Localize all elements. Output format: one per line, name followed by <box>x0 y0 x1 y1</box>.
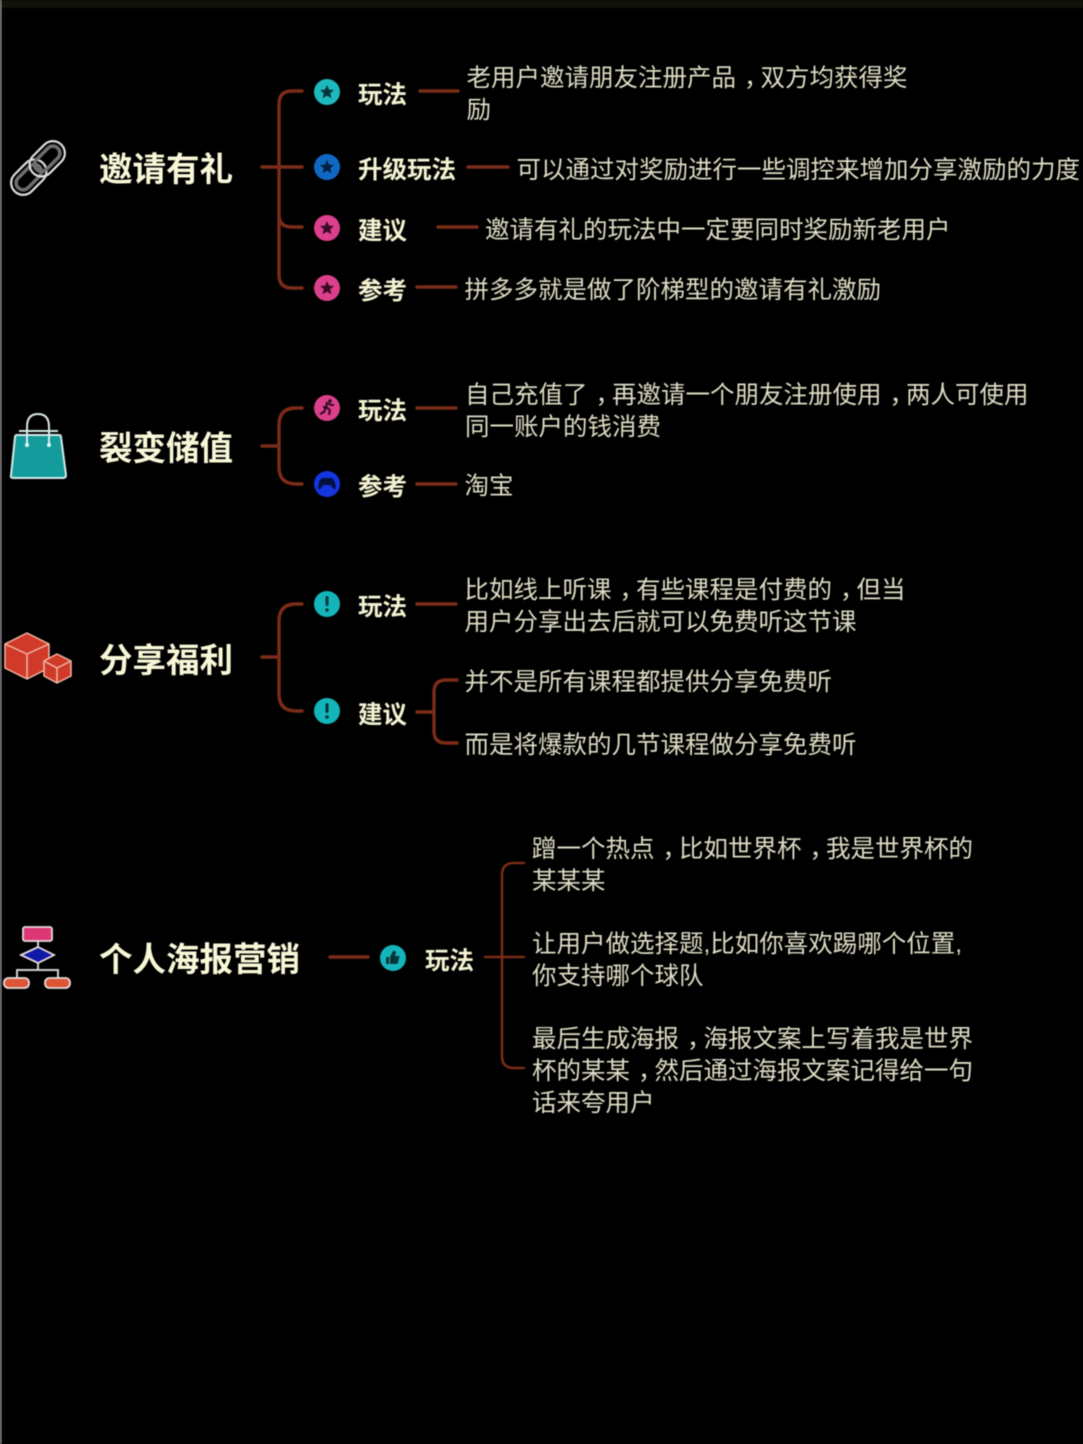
heading: 分享福利: 分享福利 <box>99 643 233 680</box>
item: 参考: 拼多多就是做了阶梯型的邀请有礼激励 <box>464 276 881 304</box>
section: 邀请有礼 <box>6 64 1080 305</box>
bracket connector <box>262 408 302 484</box>
item: 玩法: 老用户邀请朋友注册产品 ，双方均获得奖 <box>466 64 908 92</box>
icon: shopping bag <box>11 414 66 478</box>
item: 玩法: 玩法 <box>358 397 407 425</box>
connector to 玩法 <box>330 955 368 959</box>
item: 玩法: 同一账户的钱消费 <box>465 413 661 441</box>
item: 升级玩法: 升级玩法 <box>358 156 456 184</box>
heading: 个人海报营销: 个人海报营销 <box>99 942 300 979</box>
text: 选择题: 你支持哪个球队 <box>532 962 704 990</box>
item: 升级玩法 <box>314 154 1080 184</box>
section: 分享福利 <box>5 576 906 759</box>
section: 个人海报营销 <box>4 835 973 1117</box>
text: 生成海报: 杯的某某 ，然后通过海报文案记得给一句 <box>532 1057 973 1085</box>
text: 生成海报: 最后生成海报 ，海报文案上写着我是世界 <box>532 1025 973 1053</box>
item: 玩法 <box>314 576 906 636</box>
item: 玩法: 玩法 <box>358 81 407 109</box>
item: 建议: 并不是所有课程都提供分享免费听 <box>464 668 832 696</box>
bracket connector <box>262 91 302 288</box>
item: 建议: 而是将爆款的几节课程做分享免费听 <box>464 731 856 759</box>
heading: 邀请有礼: 邀请有礼 <box>99 152 233 189</box>
item: 玩法: 励 <box>466 96 491 124</box>
text: 蹭热点: 某某某 <box>532 867 606 895</box>
text: 蹭热点 <box>532 835 973 895</box>
item: 参考 <box>314 275 881 305</box>
icon: chain link <box>6 136 70 200</box>
item: 建议: 建议 <box>358 217 407 245</box>
bracket connector <box>485 863 524 1068</box>
item: 玩法: 比如线上听课 ，有些课程是付费的 ，但当 <box>464 576 906 604</box>
section: 裂变储值 <box>11 381 1028 501</box>
item: 玩法 <box>314 64 908 124</box>
text: 选择题 <box>532 930 962 990</box>
item: 玩法: 用户分享出去后就可以免费听这节课 <box>464 608 856 636</box>
item: 参考: 参考 <box>358 276 407 305</box>
item: 玩法 <box>314 381 1028 441</box>
icon: red boxes <box>5 633 71 683</box>
bracket connector <box>262 604 302 711</box>
item: 参考 <box>314 471 514 501</box>
heading: 裂变储值: 裂变储值 <box>99 431 233 468</box>
item: 参考: 淘宝 <box>464 472 514 500</box>
text: 生成海报 <box>532 1025 973 1117</box>
item: 建议 <box>314 215 950 245</box>
icon: flowchart <box>4 927 70 988</box>
item: 升级玩法: 可以通过对奖励进行一些调控来增加分享激励的力度 <box>516 156 1080 184</box>
item: 玩法: 自己充值了 ，再邀请一个朋友注册使用 ，两人可使用 <box>465 381 1028 409</box>
text: 选择题: 让用户做选择题,比如你喜欢踢哪个位置, <box>532 930 962 958</box>
item: 建议: 邀请有礼的玩法中一定要同时奖励新老用户 <box>485 216 950 244</box>
item: 建议: 建议 <box>358 701 407 729</box>
item: 建议 <box>314 668 856 759</box>
icon: thumbs up <box>380 945 406 971</box>
item: 参考: 参考 <box>358 472 407 501</box>
item: 玩法: 玩法 <box>358 593 407 621</box>
text: 生成海报: 话来夸用户 <box>532 1089 654 1117</box>
label: 玩法: 玩法 <box>425 947 474 975</box>
text: 蹭热点: 蹭一个热点 ，比如世界杯 ，我是世界杯的 <box>532 835 973 863</box>
